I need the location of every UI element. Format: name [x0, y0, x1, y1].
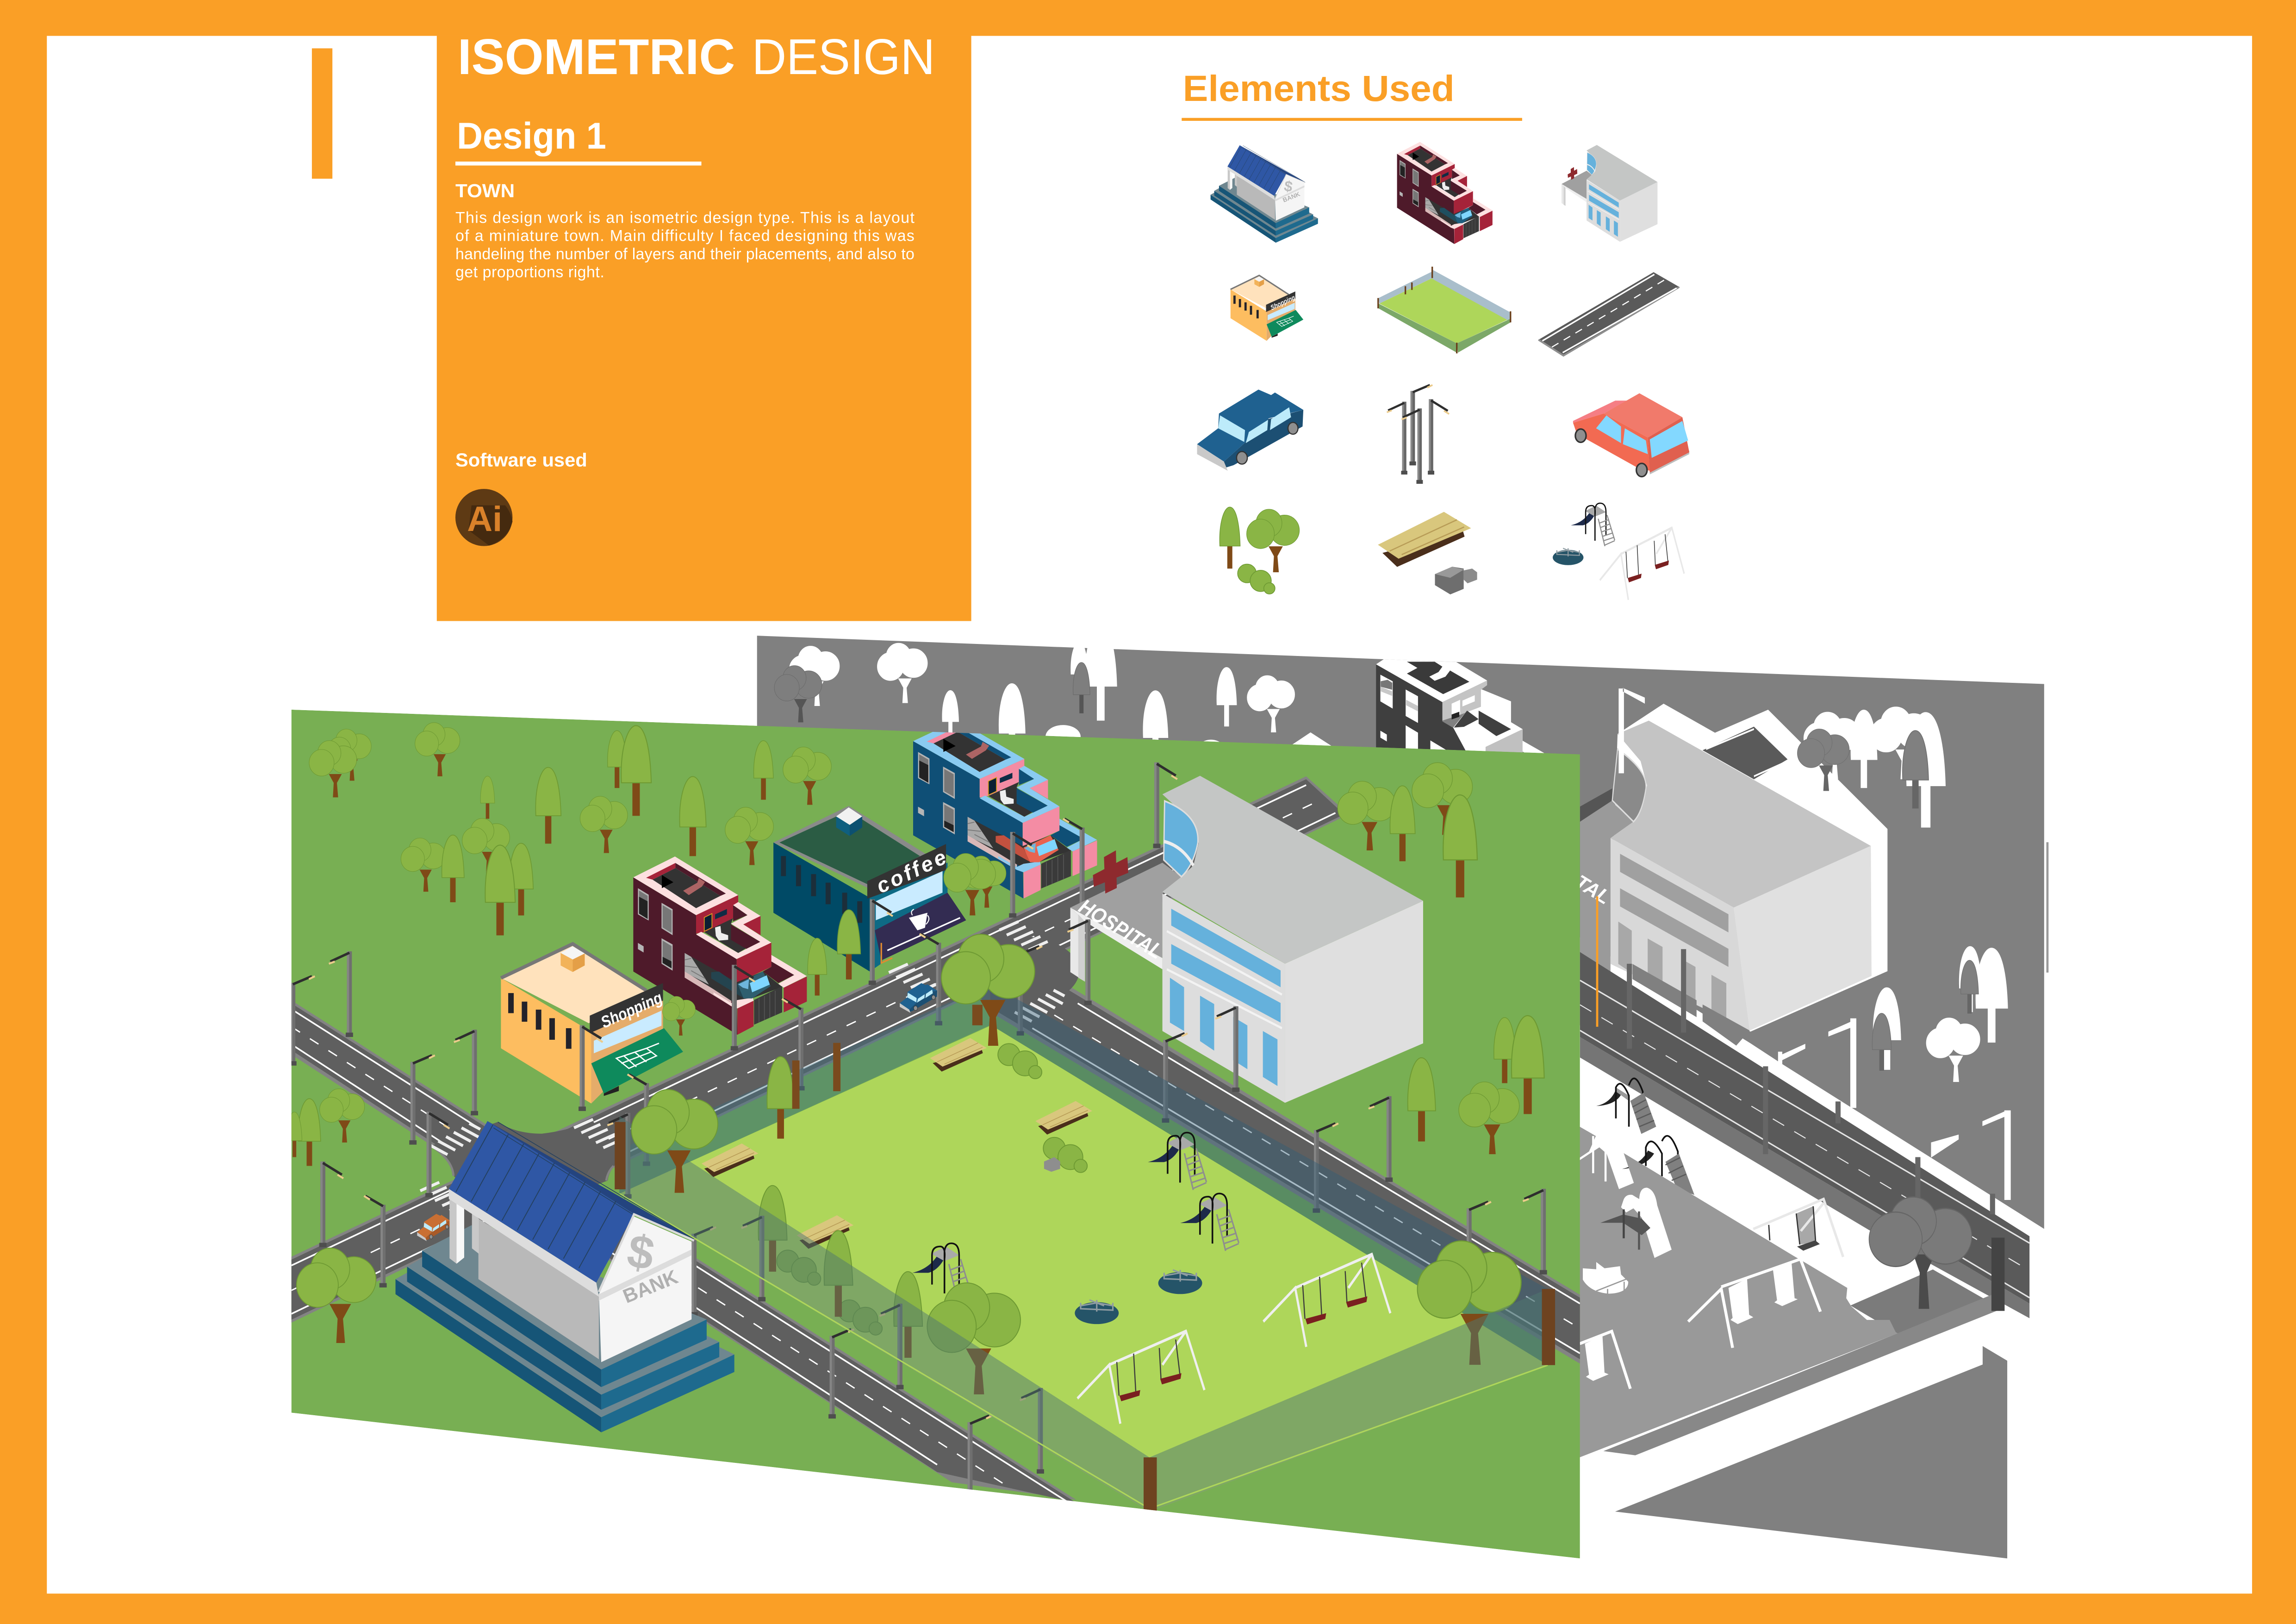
title: ISOMETRIC [458, 29, 735, 85]
small tree beside shop [663, 996, 695, 1036]
park fence posts [615, 1005, 1555, 1512]
icon: shopping store [1231, 275, 1303, 341]
gray tree ghosts, back right [1798, 729, 1979, 1071]
lower gray ground [1580, 1127, 1898, 1457]
slides [912, 1133, 1239, 1301]
merry-go-rounds [1075, 1270, 1202, 1324]
park glass walls: front [619, 1116, 1548, 1512]
grayscale slides and swing on white [1596, 1078, 1843, 1257]
trees: right meadow [1408, 1016, 1544, 1154]
bank dollar sign: $ [623, 1224, 658, 1280]
glass: front right [1150, 1289, 1548, 1512]
bank pillars [449, 1196, 479, 1264]
text: shopping: Shopping [598, 988, 665, 1032]
dark house silhouette [1376, 659, 1544, 756]
bank label: BANK [620, 1266, 681, 1308]
icon: apartment house [1397, 142, 1493, 244]
street lamps: park front [607, 1113, 1044, 1505]
grayscale big tree [1869, 1197, 1972, 1309]
bright floor edges [619, 1194, 1548, 1509]
bank walls [479, 1218, 599, 1359]
description paragraph: This design work is an isometric design type. This is a layout [455, 209, 915, 227]
car: blue, on road [900, 983, 937, 1013]
description paragraph: get proportions right. [455, 263, 604, 281]
icon: red car [1573, 393, 1689, 477]
street lamps: north block [289, 762, 1177, 1287]
subheading: town: TOWN [455, 180, 515, 201]
icon: coffee cup [909, 909, 929, 931]
gray hospital and surroundings [1580, 704, 1887, 1046]
gray lamps on road [1627, 949, 1995, 1214]
icon: street lamps [1387, 385, 1449, 484]
title: DESIGN [752, 29, 935, 85]
icon: park ground [1378, 267, 1511, 353]
lower ground darker zone [1850, 1269, 2002, 1333]
big trees at park corners [631, 934, 1035, 1193]
bank steps [396, 1223, 734, 1432]
white lamp silhouettes [1618, 688, 2011, 1200]
icon: blue car [1197, 389, 1303, 471]
road: NW to SE long [292, 1000, 1076, 1503]
icon: shopping cart [616, 1043, 659, 1068]
description paragraph: of a miniature town. Main difficulty I faced designing this was [455, 227, 915, 244]
building: blue apartment house [913, 720, 1097, 899]
icon: red cross [1093, 850, 1128, 893]
building: red apartment house [633, 856, 807, 1035]
hospital label: HOSPITAL [1075, 894, 1167, 963]
orange guide line [1596, 896, 1598, 1027]
panel: project description [437, 29, 971, 621]
orange accent bar [312, 48, 332, 179]
back hospital label fragment: TAL [1571, 871, 1614, 909]
intersection: curb arcs [432, 1146, 614, 1181]
label: software used: Software used [455, 450, 587, 471]
icon: playground [1553, 503, 1684, 600]
elements heading underline [1182, 118, 1522, 121]
panel: grayscale back layer of the town [757, 626, 2048, 1558]
park glass walls: back [619, 984, 1548, 1365]
road: SW to NE long [292, 776, 1349, 1323]
icon: illustrator logo: Ai [467, 500, 502, 539]
glass: back right [990, 984, 1548, 1365]
street lamps: right block [1017, 919, 1547, 1291]
intersection: west [432, 1120, 622, 1223]
heading underline [455, 162, 702, 166]
glass: front left [619, 1116, 1150, 1512]
trees: upper meadow [287, 723, 831, 1166]
icon: bench and rock [1378, 512, 1477, 594]
icon: road segment [1538, 272, 1680, 356]
rock [1044, 1157, 1060, 1172]
description paragraph [455, 209, 915, 281]
intersection: east [956, 936, 1079, 1006]
lower gray wedge [1615, 1346, 2007, 1558]
panel: colored town plane [287, 710, 1580, 1558]
icon: bank [1211, 145, 1318, 243]
road: SE from hospital [993, 955, 1580, 1364]
icon: trees and bushes [1220, 507, 1300, 594]
icon: illustrator logo [455, 489, 512, 546]
bank roof [487, 1121, 694, 1239]
bushes [777, 1043, 1087, 1335]
building: hospital [1070, 776, 1423, 1103]
road, grayscale [1580, 952, 2029, 1318]
park floor [619, 1025, 1548, 1512]
building: bank [396, 1121, 734, 1432]
crosswalks [420, 922, 1064, 1211]
swings [1077, 1254, 1390, 1424]
description paragraph: handeling the number of layers and their placements, and also to [455, 245, 915, 263]
white tree silhouettes, back left [790, 626, 1335, 765]
heading: elements used: Elements Used [1183, 68, 1455, 109]
trees: behind hospital [1338, 762, 1477, 898]
thin gray vertical bar [2047, 842, 2048, 973]
lower ground edge strip [1603, 1292, 2002, 1455]
gray tree ghosts, back left [774, 662, 1090, 722]
back plane [757, 636, 2044, 1229]
benches [702, 1038, 1092, 1249]
trees: near coffee shop [808, 854, 1006, 995]
white tree silhouettes, back right [1804, 707, 2007, 1082]
building: shopping store [501, 944, 683, 1104]
tree: bottom left [297, 1248, 376, 1343]
grayscale corner post [1991, 1237, 2004, 1311]
heading: design 1: Design 1 [457, 115, 606, 157]
panel: elements grid [1197, 142, 1689, 600]
building: coffee shop [773, 806, 966, 972]
text: coffee: coffee [872, 844, 952, 898]
icon: hospital [1562, 145, 1657, 242]
title [458, 29, 935, 85]
roads [292, 776, 1580, 1503]
car: orange, on road [417, 1214, 450, 1241]
green ground plane [292, 710, 1580, 1558]
glass: back left [619, 984, 990, 1194]
trees: park [759, 1056, 1521, 1394]
